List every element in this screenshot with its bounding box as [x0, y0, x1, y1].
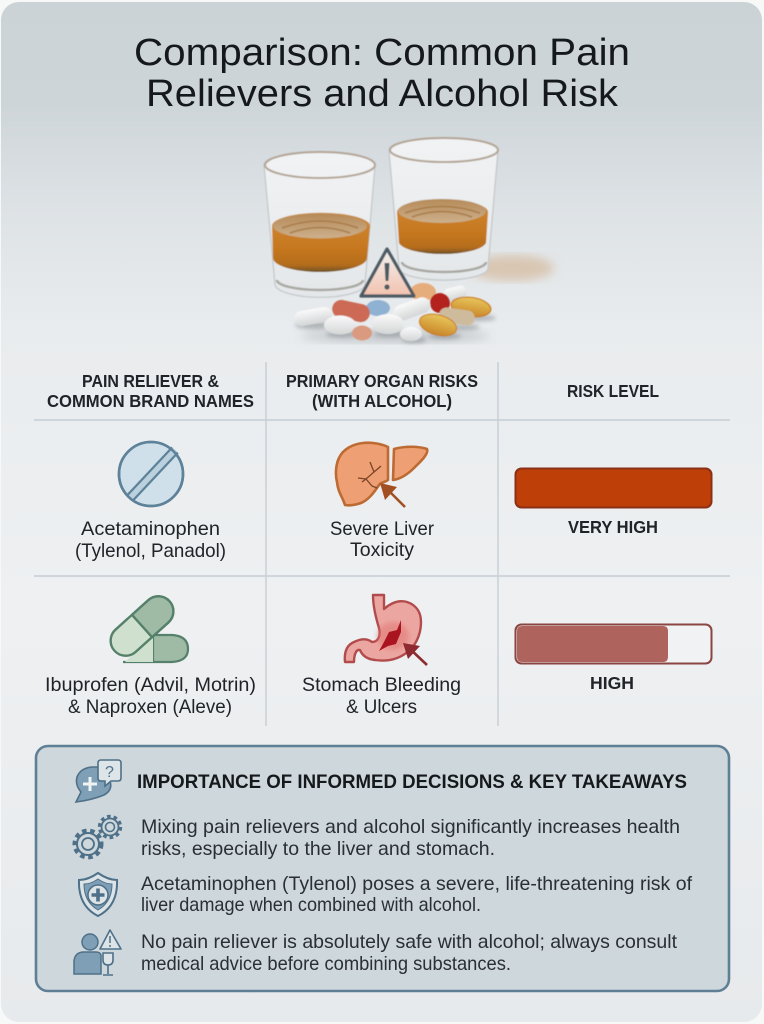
heading: importance of informed decisions: IMPORTANCE OF INFORMED DECISIONS & KEY TAKEAWAYS [137, 772, 687, 793]
text: consult medical advice: medical advice before combining substances. [141, 953, 511, 975]
icon: warning triangle [361, 249, 414, 296]
text: acetaminophen warning: Acetaminophen (Tylenol) poses a severe, life-threatening risk of [141, 873, 693, 895]
panel: key takeaways [36, 746, 729, 991]
risk bar: high [516, 624, 712, 664]
table header: PAIN RELIEVER & [82, 371, 219, 391]
icon: medical chat bubbles: ? [105, 764, 114, 781]
table grid [34, 362, 730, 726]
left glass [264, 152, 375, 297]
icon: liver with arrow [336, 443, 427, 507]
text: acetaminophen name: (Tylenol, Panadol) [75, 540, 226, 562]
table header: COMMON BRAND NAMES [47, 391, 254, 411]
text: ibuprofen and naproxen names: & Naproxen (Aleve) [68, 696, 232, 718]
text: stomach bleeding and ulcers: Stomach Bleeding [302, 674, 461, 696]
icon: person with warning and wine glass [74, 930, 121, 975]
icon: stomach with arrow [345, 595, 427, 665]
text: severe liver toxicity: Severe Liver [330, 518, 434, 540]
table header: (WITH ALCOHOL) [312, 391, 452, 411]
pills [293, 283, 496, 343]
text: mixing risks [141, 816, 680, 860]
label: high: HIGH [590, 673, 634, 693]
text: stomach bleeding and ulcers [302, 674, 461, 718]
right glass [389, 138, 498, 280]
text: severe liver toxicity: Toxicity [350, 539, 414, 561]
row 2: ibuprofen and naproxen [45, 590, 712, 718]
table header: RISK LEVEL [567, 381, 659, 401]
text: acetaminophen warning [141, 873, 693, 916]
shadows under the glasses and pills [300, 255, 554, 343]
text: acetaminophen warning: liver damage when combined with alcohol. [141, 894, 481, 916]
table header: PRIMARY ORGAN RISKS [286, 371, 478, 391]
title: Comparison: Common Pain [134, 32, 630, 74]
illustration: two whisky glasses, pills and warning sign [264, 138, 554, 343]
text: acetaminophen name [75, 518, 226, 562]
text: stomach bleeding and ulcers: & Ulcers [346, 696, 417, 718]
text: acetaminophen name: Acetaminophen [81, 518, 220, 540]
text: consult medical advice: No pain reliever is absolutely safe with alcohol; always consult [141, 931, 678, 953]
title: Relievers and Alcohol Risk [146, 73, 619, 115]
risk bar: very high [516, 468, 712, 508]
text: mixing risks: risks, especially to the liver and stomach. [141, 838, 495, 860]
table header [47, 371, 659, 411]
text: severe liver toxicity [330, 518, 434, 561]
icon: shield with cross [79, 873, 117, 916]
title [134, 32, 630, 115]
icon: medical chat bubbles [76, 760, 121, 802]
icon: two capsules [104, 590, 188, 662]
text: ibuprofen and naproxen names: Ibuprofen (Advil, Motrin) [45, 674, 256, 696]
text: ibuprofen and naproxen names [45, 674, 256, 718]
icon: round scored tablet [119, 442, 183, 506]
label: very high: VERY HIGH [568, 517, 658, 537]
row 1: acetaminophen [75, 442, 712, 562]
text: consult medical advice [141, 931, 678, 975]
icon: gears [74, 816, 120, 858]
text: mixing risks: Mixing pain relievers and alcohol significantly increases health [141, 816, 680, 838]
